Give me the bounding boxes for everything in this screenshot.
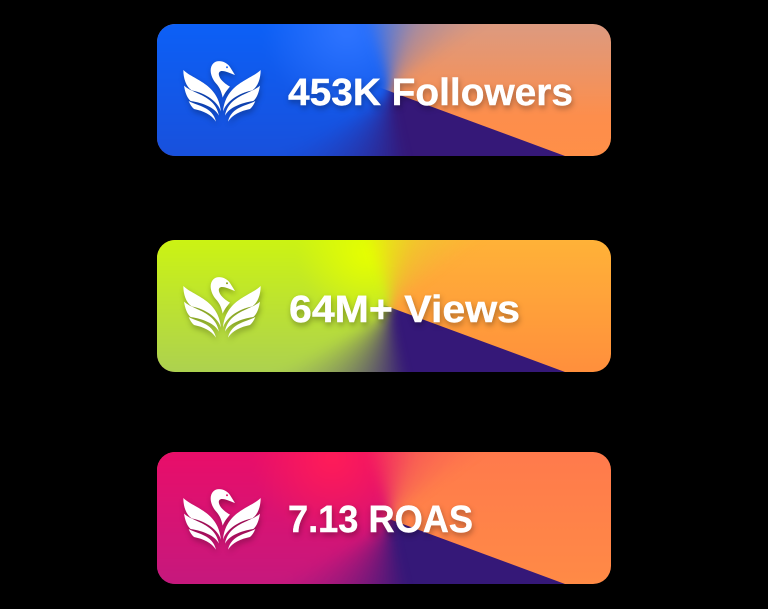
card: views [157,240,611,372]
stat: 453K Followers: 453K Followers [288,72,573,114]
icon: swan [183,489,261,550]
card: followers [157,24,611,156]
card: ROAS [157,452,611,584]
icon: swan [183,277,261,338]
stat: 7.13 ROAS: 7.13 ROAS [288,499,473,541]
stat: 64M+ Views: 64M+ Views [289,289,520,331]
icon: swan [183,61,261,122]
